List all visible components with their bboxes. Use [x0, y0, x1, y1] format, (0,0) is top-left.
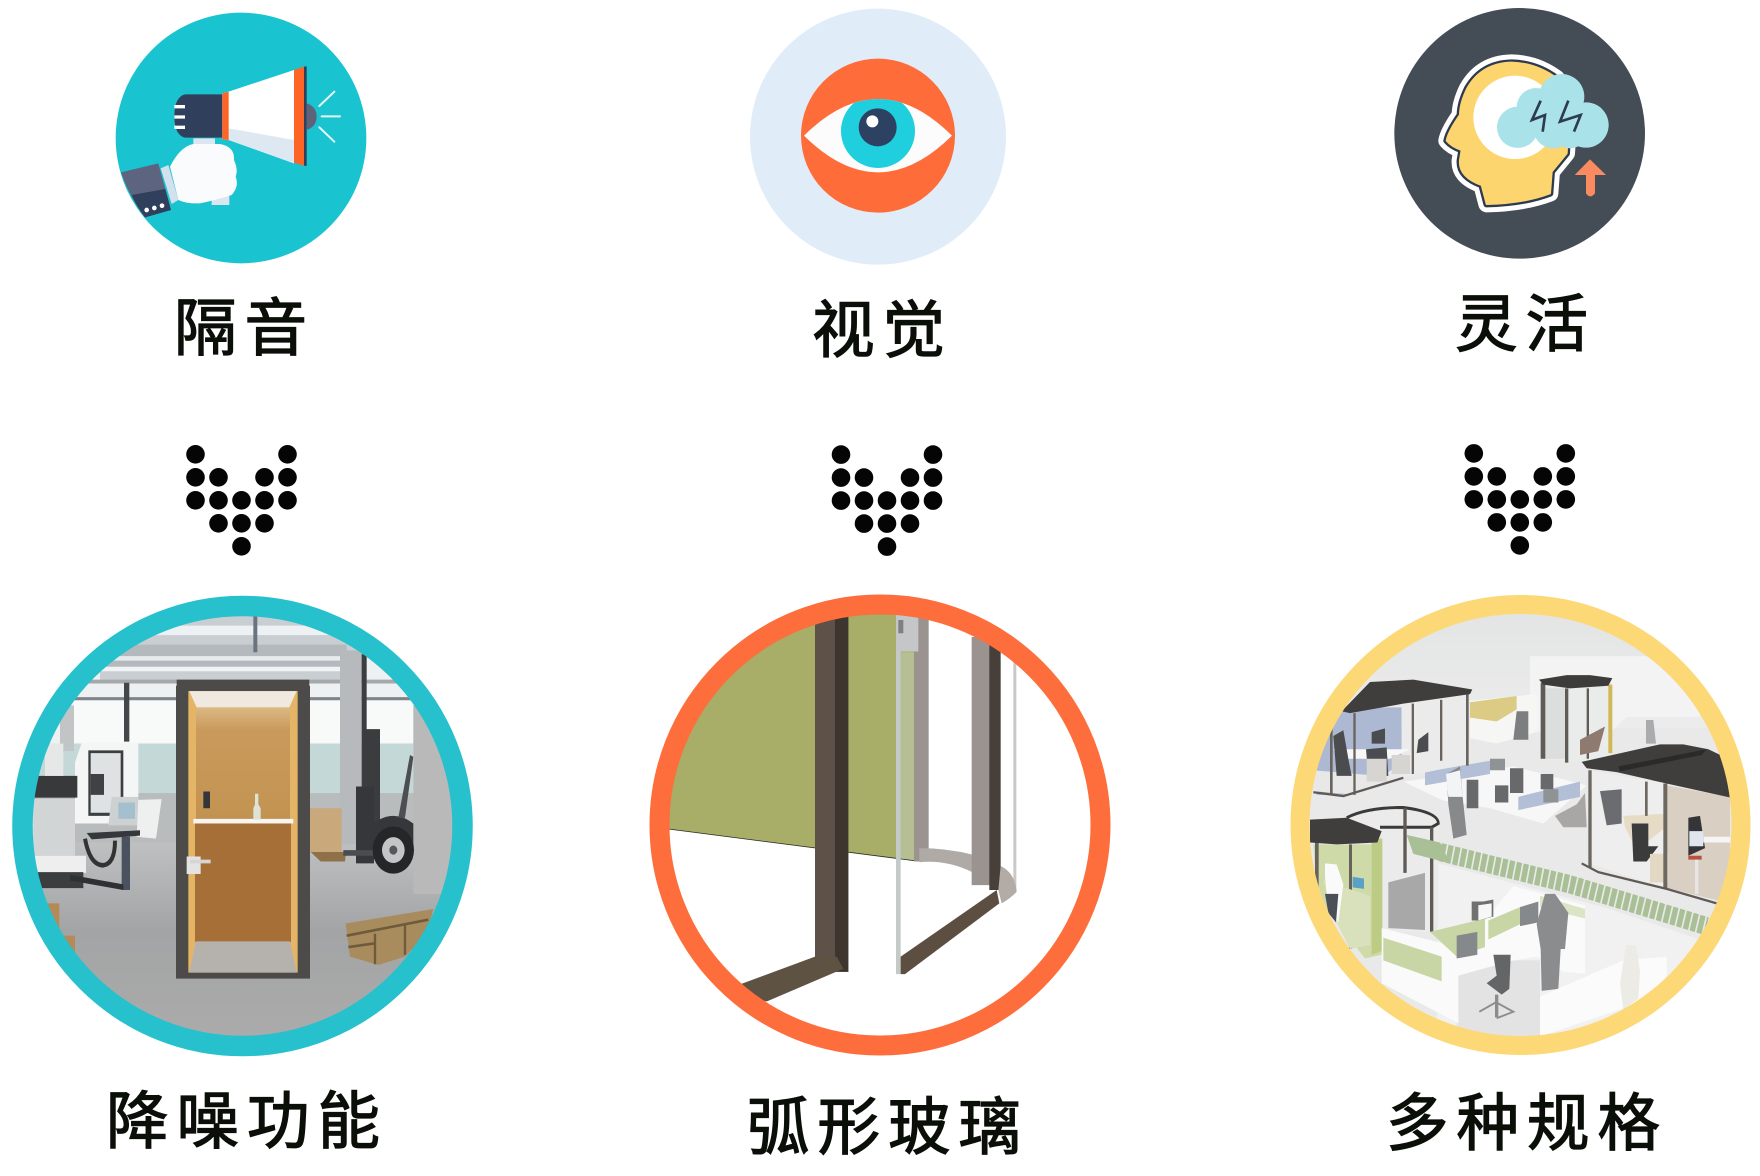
floor — [27, 842, 460, 1040]
hand — [170, 144, 237, 203]
sleeve — [121, 163, 171, 217]
eye white — [804, 99, 952, 172]
meeting people — [1333, 728, 1428, 776]
bracket — [896, 614, 918, 652]
main post — [815, 610, 848, 972]
arrow up — [1575, 159, 1606, 196]
lightning — [1532, 101, 1581, 132]
megaphone cone — [222, 70, 294, 163]
window greenery — [33, 744, 413, 793]
base — [998, 866, 1017, 903]
buttons — [144, 203, 164, 212]
seated woman 3 — [1688, 816, 1705, 856]
desks mid — [1403, 766, 1587, 823]
pallet — [346, 909, 433, 965]
device — [203, 792, 210, 808]
left sill — [740, 957, 843, 1001]
label: 视觉: 视觉 — [812, 296, 953, 366]
arrow: dots 1 — [186, 445, 297, 556]
forklift — [366, 729, 380, 823]
pale glass section — [901, 652, 915, 860]
label: 多种规格: 多种规格 — [1386, 1089, 1668, 1159]
standing man bottom — [1537, 894, 1568, 991]
icon: eye — [750, 9, 1006, 265]
booth frame — [176, 680, 310, 979]
grip lines — [174, 105, 185, 129]
orange bands — [222, 67, 304, 166]
speaker cap — [307, 103, 317, 130]
bottle — [253, 794, 261, 820]
post dark strip — [835, 610, 848, 972]
chairs — [1467, 768, 1553, 808]
label: 灵活: 灵活 — [1455, 290, 1596, 360]
megaphone handle — [174, 94, 222, 138]
photo circle: booth in factory — [12, 596, 473, 1056]
photo circle: curved glass — [650, 594, 1110, 1056]
label: 降噪功能: 降噪功能 — [106, 1087, 388, 1157]
room 4 green — [1313, 844, 1382, 958]
sleeve shade — [132, 189, 171, 217]
control panel — [108, 797, 138, 825]
head — [1447, 63, 1570, 204]
woman in green room — [1325, 863, 1343, 922]
lower wall — [33, 793, 414, 842]
photo circle: office layout — [1290, 595, 1750, 1055]
post 2 — [972, 637, 991, 885]
label: 弧形玻璃: 弧形玻璃 — [747, 1093, 1029, 1163]
arrow: dots 3 — [1464, 444, 1575, 555]
sound lines — [319, 92, 340, 142]
plant in glass — [1407, 835, 1450, 863]
boxes — [310, 808, 342, 852]
standing woman right — [1620, 945, 1640, 1010]
bottom workstation — [1382, 886, 1585, 1023]
cone shadow — [229, 128, 294, 163]
icon: megaphone — [116, 13, 366, 263]
rim — [304, 66, 307, 166]
standing man — [1447, 766, 1467, 839]
gray arc sill — [919, 848, 972, 872]
cuff — [161, 165, 178, 204]
booth interior — [188, 691, 298, 973]
room 3 — [1588, 770, 1667, 888]
glass line — [1013, 662, 1016, 892]
icon: head with cloud — [1394, 8, 1645, 259]
arrow: dots 2 — [832, 445, 942, 556]
room 2 — [1542, 683, 1612, 763]
green wall — [660, 603, 915, 861]
cloud — [1497, 74, 1609, 148]
machine — [75, 743, 138, 823]
cabinets — [1540, 957, 1667, 1036]
room 4 glass — [1348, 807, 1438, 932]
floor bottom — [1437, 863, 1700, 1036]
left boxes — [47, 903, 75, 955]
ceiling — [100, 614, 367, 681]
glass door edge — [896, 652, 901, 974]
brain highlight — [1473, 76, 1557, 159]
label: 隔音: 隔音 — [174, 294, 315, 364]
grip below hand — [193, 138, 229, 205]
seated woman bottom — [1472, 900, 1493, 920]
handle — [187, 857, 201, 874]
printer — [1388, 873, 1425, 930]
columns — [340, 650, 362, 844]
seated woman — [1555, 793, 1587, 827]
chair — [1487, 955, 1511, 995]
room 1 — [1317, 707, 1402, 795]
back standing person — [1646, 720, 1656, 744]
iris — [841, 94, 915, 168]
door sill — [901, 890, 999, 974]
gray post — [914, 610, 929, 861]
plants band — [1440, 852, 1707, 926]
